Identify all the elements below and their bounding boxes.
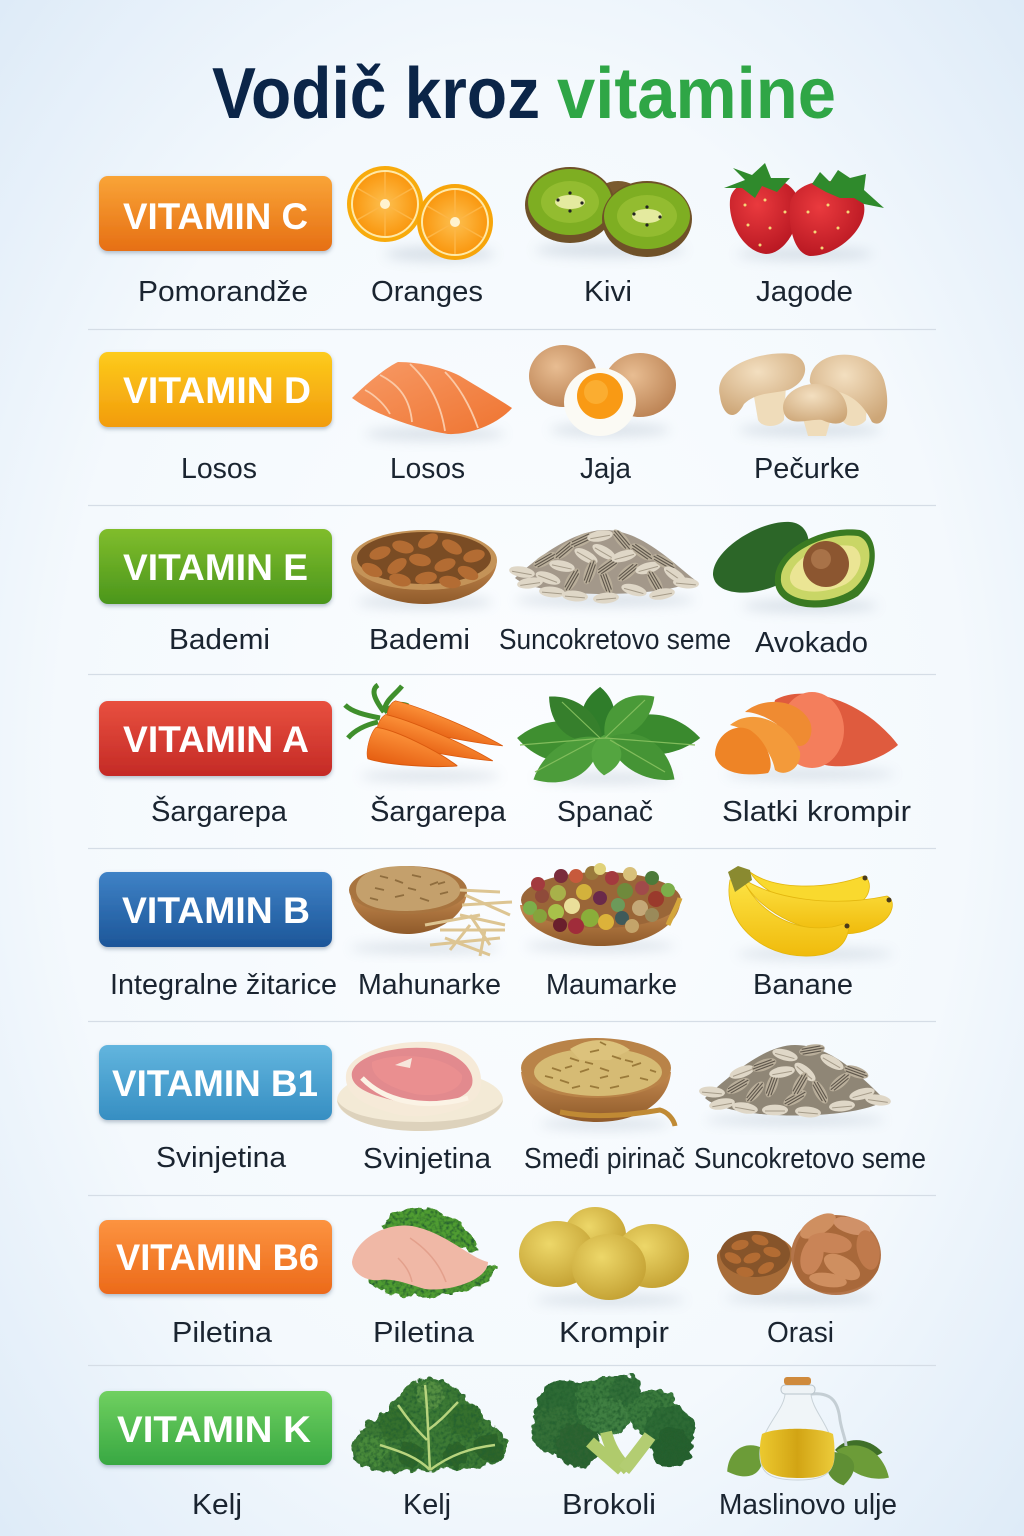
icon: pork on plate [337,1042,503,1131]
badge: vitamin B1 [99,1045,332,1120]
icon: salmon fillet [352,362,512,440]
label: Piletina: Piletina [373,1317,475,1349]
badge: vitamin B6 [99,1220,332,1294]
label: Suncokretovo seme: Suncokretovo seme [694,1143,926,1175]
label: Integralne žitarice: Integralne žitarice [110,969,337,1001]
badge: vitamin A: VITAMIN A [123,719,309,760]
badge: vitamin B6: VITAMIN B6 [116,1237,319,1278]
label: Kelj: Kelj [192,1489,242,1521]
label: Pečurke: Pečurke [754,453,860,485]
icon: orange slices [347,166,495,261]
icon: olive oil bottle [720,1377,896,1488]
label: Bademi: Bademi [369,624,470,656]
row: vitamin E [99,522,878,659]
label: Kivi: Kivi [584,276,632,308]
badge: vitamin C: VITAMIN C [123,196,308,237]
label: Kelj: Kelj [403,1489,451,1521]
label: Šargarepa: Šargarepa [370,794,507,828]
title: Vodič kroz [212,54,540,134]
label: Piletina: Piletina [172,1317,273,1349]
badge: vitamin A [99,701,332,776]
row: vitamin D [99,345,887,485]
icon: almonds in bowl [351,530,497,608]
label: Suncokretovo seme: Suncokretovo seme [499,624,731,656]
icon: spinach [517,682,700,797]
icon: broccoli [531,1374,695,1470]
icon: strawberries [724,163,884,260]
label: Krompir: Krompir [559,1317,669,1349]
label: Banane: Banane [753,969,853,1001]
badge: vitamin E [99,529,332,604]
icon: potatoes [519,1207,689,1305]
icon: kiwi [525,167,692,257]
icon: kale [352,1378,507,1472]
label: Svinjetina: Svinjetina [363,1143,492,1175]
badge: vitamin C [99,176,332,251]
icon: sunflower seeds [508,527,699,606]
label: Spanač: Spanač [557,796,653,828]
row: vitamin C [99,163,884,308]
icon: carrots [345,685,506,782]
badge: vitamin B [99,872,332,947]
icon: avocado [713,522,878,612]
row: vitamin A [99,682,911,828]
label: Maslinovo ulje: Maslinovo ulje [719,1489,897,1521]
label: Oranges: Oranges [371,276,483,308]
icon: sweet potato [715,692,898,779]
icon: sunflower seeds [699,1042,892,1125]
row: vitamin B [99,863,893,1001]
badge: vitamin D: VITAMIN D [123,370,311,411]
label: Orasi: Orasi [767,1317,834,1349]
label: Jaja: Jaja [580,453,632,485]
row: vitamin B1 [99,1038,926,1175]
icon: whole grain bowl [349,866,512,956]
label: Avokado: Avokado [755,627,868,659]
label: Smeđi pirinač: Smeđi pirinač [524,1143,685,1175]
icon: legumes bowl [520,863,681,951]
label: Brokoli: Brokoli [562,1489,656,1521]
label: Jagode: Jagode [756,276,853,308]
badge: vitamin B: VITAMIN B [122,890,310,931]
badge: vitamin B1: VITAMIN B1 [112,1063,318,1104]
badge: vitamin K [99,1391,332,1465]
label: Losos: Losos [390,453,465,485]
label: Maumarke: Maumarke [546,969,677,1001]
label: Svinjetina: Svinjetina [156,1142,287,1174]
label: Losos: Losos [181,453,257,485]
icon: brown rice bowl [521,1038,675,1129]
icon: eggs [529,345,676,436]
label: Šargarepa: Šargarepa [151,794,288,828]
badge: vitamin K: VITAMIN K [117,1409,311,1450]
icon: bananas [728,866,893,959]
icon: mushrooms [719,353,887,436]
label: Slatki krompir: Slatki krompir [722,796,911,828]
row: vitamin K [99,1374,897,1521]
title [212,54,836,134]
badge: vitamin E: VITAMIN E [123,547,308,588]
label: Mahunarke: Mahunarke [358,969,501,1001]
label: Bademi: Bademi [169,624,270,656]
label: Pomorandže: Pomorandže [138,276,308,308]
icon: walnuts [717,1208,883,1303]
icon: chicken with lettuce [352,1208,498,1297]
row: vitamin B6 [99,1207,883,1349]
title: vitamine [557,54,836,134]
badge: vitamin D [99,352,332,427]
